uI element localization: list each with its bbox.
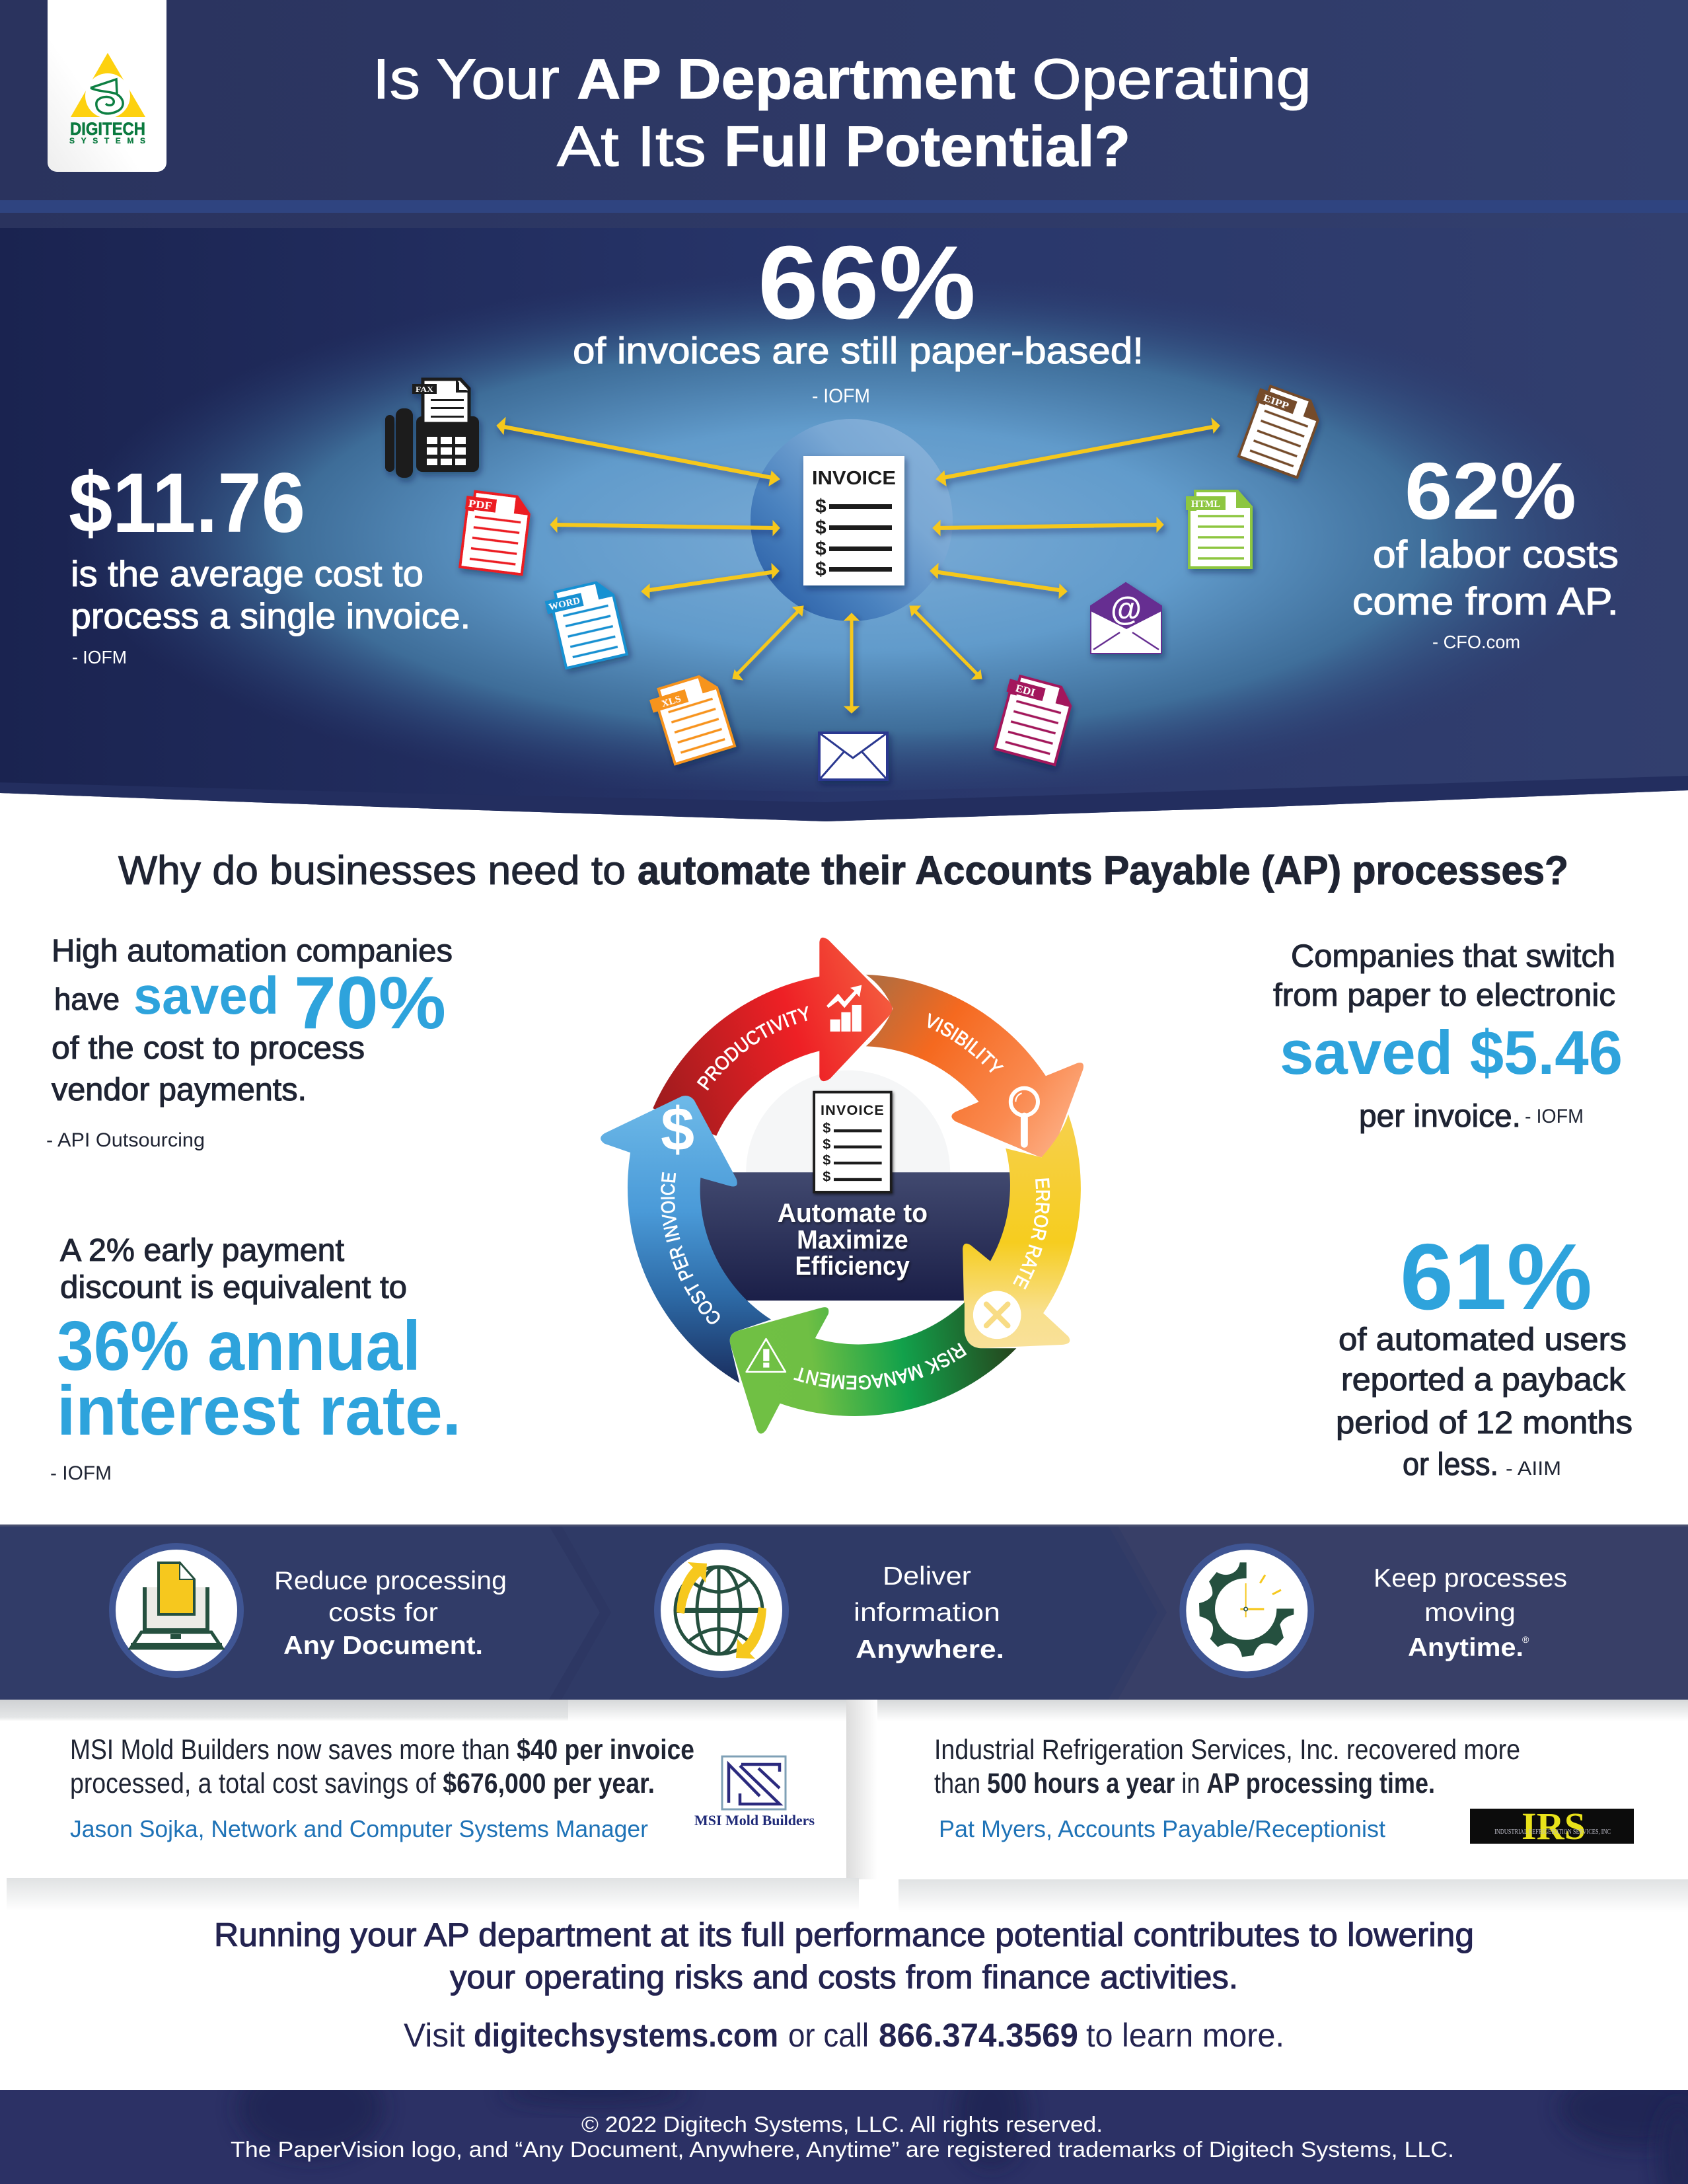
panel: Industrial Refrigeration testimonial [877, 1721, 1688, 1879]
call to action: 866.374.3569 [879, 2017, 1078, 2054]
logo: MSI: MSI Mold Builders [694, 1812, 815, 1828]
center label: Automate to [778, 1199, 928, 1228]
arrow: email [930, 564, 1067, 598]
stat: saved 70%: - API Outsourcing [46, 1129, 205, 1151]
heading: why automate [118, 848, 1568, 893]
center invoice [814, 1092, 891, 1192]
stat: 36% annual interest rate: 36% annual [57, 1307, 421, 1385]
icon: EIPP document [1235, 383, 1323, 478]
center invoice: $ [823, 1168, 830, 1185]
logo: IRS: INDUSTRIAL REFRIGERATION SERVICES, INC [1494, 1828, 1611, 1836]
arrow: visibility [866, 975, 1083, 1157]
stat: 61% payback [1336, 1224, 1633, 1482]
stat: saved $5.46: Companies that switch [1291, 939, 1615, 974]
call to action: Visit [404, 2017, 465, 2054]
title [373, 48, 1311, 178]
ring labels [661, 1006, 1050, 1390]
call to action: or call [788, 2017, 869, 2054]
header stripe [0, 200, 1688, 213]
icon: error cross [973, 1291, 1021, 1339]
stat: saved 70% [46, 934, 453, 1151]
stat: 62% labor costs [1352, 446, 1619, 652]
ring labels: COST PER INVOICE [661, 1172, 720, 1324]
stat: 36% annual interest rate: - IOFM [50, 1462, 112, 1484]
panel: Industrial Refrigeration testimonial: Pat Myers, Accounts Payable/Receptionist [939, 1815, 1385, 1842]
stat: saved 70%: have [54, 982, 120, 1016]
panel: MSI Mold Builders testimonial [0, 1721, 846, 1878]
text: any document [274, 1567, 507, 1660]
stat: saved 70%: saved [133, 966, 279, 1025]
arrows: hub to document sources [497, 418, 1220, 713]
panel: benefits band [0, 1525, 1688, 1700]
stat: saved $5.46: from paper to electronic [1273, 978, 1615, 1013]
arrow: cost per invoice [601, 1096, 771, 1383]
panel: logo card [48, 0, 166, 172]
center invoice: INVOICE [821, 1102, 884, 1118]
heading: why automate: automate their Accounts Payable (AP) processes? [638, 848, 1568, 893]
hero background panel [0, 228, 1688, 821]
arrow: edi [910, 606, 982, 679]
center label [778, 1199, 928, 1281]
logo: IRS: IRS [1522, 1805, 1586, 1848]
text: anywhere: Deliver [883, 1562, 971, 1591]
icon: fax machine: FAX [416, 385, 433, 394]
stat: saved 70%: vendor payments. [52, 1073, 307, 1108]
ring labels: VISIBILITY [928, 1012, 1004, 1073]
icon: laptop with document [112, 1546, 240, 1675]
arrow: error rate [963, 1114, 1081, 1348]
closing statement: your operating risks and costs from finance activities. [450, 1959, 1238, 1996]
stat: saved 70%: High automation companies [52, 934, 453, 969]
stat: 62% labor costs: come from AP. [1352, 580, 1619, 623]
center invoice: $ [823, 1119, 830, 1136]
header background [0, 0, 1688, 228]
call to action: to learn more. [1086, 2017, 1284, 2054]
text: any document: costs for [328, 1599, 438, 1627]
title: Operating [1032, 48, 1311, 111]
stat: 61% payback: or less. [1403, 1447, 1498, 1482]
arrow: html [933, 517, 1163, 535]
stat: 66% of invoices paper-based: 66% [758, 225, 976, 341]
panel: logo card: SYSTEMS [69, 136, 145, 145]
text: anywhere: Anywhere. [856, 1636, 1004, 1664]
icon: central invoice document: $ [815, 538, 826, 560]
icon: dollar: $ [661, 1094, 694, 1163]
stat: saved $5.46: per invoice. [1359, 1099, 1521, 1134]
center invoice: $ [823, 1135, 830, 1152]
icon: HTML document: HTML [1191, 499, 1220, 509]
panel: footer: © 2022 Digitech Systems, LLC. All rights reserved. [581, 2112, 1103, 2136]
stat: 61% payback: - AIIM [1506, 1458, 1561, 1480]
panel: footer: The PaperVision logo, and “Any Document, Anywhere, Anytime” are registered trademarks of Digitech Systems, LLC. [231, 2137, 1454, 2162]
stat: saved $5.46 [1273, 939, 1623, 1134]
stat: 36% annual interest rate: discount is equivalent to [60, 1270, 407, 1305]
icon: EIPP document: EIPP [1262, 393, 1290, 412]
stat: 36% annual interest rate: interest rate. [57, 1372, 461, 1450]
icon: HTML document [1186, 491, 1251, 568]
arrow: productivity [653, 938, 893, 1136]
stat: saved 70%: 70% [294, 961, 446, 1044]
title: At Its [557, 115, 706, 178]
closing statement: Running your AP department at its full performance potential contributes to lowering [214, 1916, 1474, 1953]
logo: MSI [694, 1756, 815, 1828]
title: Full Potential? [724, 115, 1130, 178]
text: anywhere [854, 1562, 1004, 1664]
icon: XLS document: XLS [660, 694, 682, 710]
stat: $11.76 cost per invoice: is the average cost to [71, 553, 423, 594]
call to action [404, 2017, 1284, 2054]
panel: Industrial Refrigeration testimonial: Industrial Refrigeration Services, Inc. recovered more [934, 1734, 1520, 1766]
icon: fax machine [385, 379, 479, 478]
ring labels: RISK MANAGEMENT [793, 1343, 967, 1390]
panel: Industrial Refrigeration testimonial: than 500 hours a year in AP processing time. [934, 1768, 1435, 1799]
icon: central invoice document: INVOICE [812, 468, 896, 489]
stat: 62% labor costs: - CFO.com [1432, 632, 1520, 652]
stat: 62% labor costs: 62% [1405, 446, 1576, 536]
stat: 66% of invoices paper-based: of invoices are still paper-based! [573, 330, 1144, 372]
text: anytime: Anytime. [1408, 1634, 1523, 1662]
arrow: xls [733, 606, 803, 680]
icon: paper mail envelope [819, 733, 887, 780]
icon: EDI document [992, 674, 1074, 765]
stat: $11.76 cost per invoice: - IOFM [72, 647, 127, 667]
icon: central invoice document: $ [815, 517, 826, 539]
stat: 36% annual interest rate [50, 1233, 461, 1484]
call to action: digitechsystems.com [474, 2017, 778, 2054]
center label: Efficiency [795, 1252, 910, 1281]
stat: 61% payback: period of 12 months [1336, 1406, 1633, 1441]
icon: chart [826, 985, 862, 1032]
icon: EDI document: EDI [1014, 683, 1037, 698]
arrow: envelope [844, 613, 859, 713]
stat: $11.76 cost per invoice [69, 456, 470, 667]
ring labels: PRODUCTIVITY [696, 1006, 809, 1090]
stat: saved $5.46: saved $5.46 [1280, 1018, 1623, 1087]
stat: $11.76 cost per invoice: process a single invoice. [71, 595, 470, 636]
stat: 36% annual interest rate: A 2% early payment [60, 1233, 344, 1268]
stat: $11.76 cost per invoice: $11.76 [69, 456, 305, 550]
icon: PDF document: PDF [468, 498, 493, 512]
icon: XLS document [647, 673, 735, 766]
text: any document: Any Document. [283, 1632, 483, 1660]
arrow: risk management [730, 1302, 1016, 1434]
stat: saved 70%: of the cost to process [52, 1031, 365, 1066]
stat: saved $5.46: - IOFM [1525, 1106, 1584, 1127]
title: AP Department [577, 48, 1015, 111]
heading: why automate: Why do businesses need to [118, 848, 626, 893]
panel: MSI Mold Builders testimonial: processed, a total cost savings of $676,000 per year. [70, 1768, 655, 1799]
icon: central glow circle [751, 419, 953, 621]
panel: MSI Mold Builders testimonial: MSI Mold Builders now saves more than $40 per invoice [70, 1734, 694, 1766]
stat: 66% of invoices paper-based [573, 225, 1144, 407]
text: any document: Reduce processing [274, 1567, 507, 1595]
icon: gear clock [1183, 1546, 1311, 1675]
icon: magnifier [1011, 1088, 1038, 1144]
stat: 61% payback: of automated users [1339, 1322, 1627, 1357]
icon: email envelope: @ [1111, 590, 1142, 627]
icon: WORD document [543, 580, 627, 669]
icon: warning [747, 1339, 786, 1372]
icon: WORD document: WORD [548, 595, 581, 613]
stat: 61% payback: 61% [1400, 1224, 1592, 1330]
panel: footer [0, 2090, 1688, 2184]
text: anywhere: information [854, 1599, 1000, 1627]
stat: 61% payback: reported a payback [1341, 1363, 1626, 1398]
panel: MSI Mold Builders testimonial: Jason Sojka, Network and Computer Systems Manager [70, 1815, 648, 1842]
shadows: behind testimonial cards [0, 1700, 1688, 1912]
text: anytime: Keep processes [1374, 1564, 1567, 1593]
closing statement [214, 1916, 1474, 1996]
icon: email envelope [1091, 583, 1161, 654]
logo: IRS [1470, 1805, 1634, 1848]
chart: automation cycle [601, 937, 1083, 1434]
arrow: pdf [550, 517, 780, 535]
icon: globe with arrows [657, 1546, 786, 1675]
panel: logo card: DIGITECH [70, 119, 145, 139]
center invoice: $ [823, 1152, 830, 1168]
ring labels: ERROR RATE [1013, 1178, 1050, 1290]
text: anytime: moving [1424, 1599, 1516, 1627]
text: anytime [1374, 1564, 1567, 1662]
arrow: fax [497, 418, 780, 486]
icon: central invoice document: $ [815, 558, 826, 580]
stat: 62% labor costs: of labor costs [1373, 533, 1619, 576]
title: Is Your [373, 48, 560, 111]
arrow: word [642, 564, 779, 598]
stat: 66% of invoices paper-based: - IOFM [812, 385, 870, 407]
icon: central invoice document: $ [815, 496, 826, 517]
text: anytime: ® [1522, 1634, 1529, 1645]
icon: PDF document [458, 490, 531, 574]
arrow: eipp [936, 418, 1220, 486]
icon: central invoice document [803, 456, 904, 585]
center label: Maximize [797, 1226, 908, 1255]
